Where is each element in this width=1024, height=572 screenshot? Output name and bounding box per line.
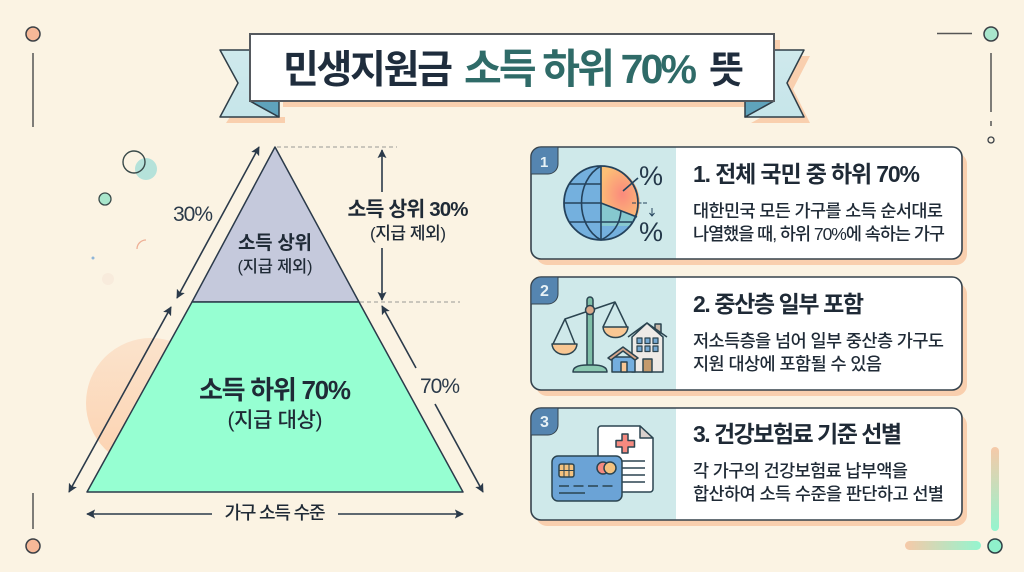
pyramid bottom label: 소득 하위 70%: [199, 375, 351, 405]
axis label: 가구 소득 수준: [224, 503, 326, 523]
arrow: horizontal income level: [87, 513, 463, 515]
pyramid top label: 소득 상위: [238, 232, 312, 254]
card 3 body: [693, 461, 944, 504]
right ribbon shadow: [751, 56, 810, 123]
pyramid bottom sublabel: (지급 대상): [228, 409, 322, 432]
left ribbon fold: [250, 101, 279, 117]
icon: globe with percent: %: [639, 217, 663, 247]
right ribbon: [745, 50, 804, 117]
callout: excluded: (지급 제외): [370, 224, 446, 243]
icon: medical document and card: [552, 426, 653, 501]
pyramid top sublabel: (지급 제외): [238, 257, 312, 276]
icon: scale and houses: [552, 297, 667, 372]
box shadow: [283, 40, 780, 107]
dashed guides: [277, 147, 460, 302]
label: 70%: 70%: [420, 375, 460, 398]
card 3 body: 합산하여 소득 수준을 판단하고 선별: [693, 484, 944, 504]
left ribbon: [220, 50, 279, 117]
right ribbon fold: [745, 101, 774, 117]
decoration: bottom-left dot and line: [26, 493, 40, 553]
card 2 body: 지원 대상에 포함될 수 있음: [693, 354, 882, 374]
card 1 heading: 1. 전체 국민 중 하위 70%: [693, 161, 920, 187]
decoration: top-left dot and line: [26, 27, 40, 127]
panel: card 3: [531, 408, 967, 526]
badge 1: 1: [540, 154, 548, 171]
decoration: bottom-right gradient bars and dot: [905, 447, 1002, 553]
arrow: right 70%: [382, 306, 483, 492]
pyramid bottom: lower 70%: [87, 302, 463, 492]
card 3 heading: 3. 건강보험료 기준 선별: [693, 421, 902, 447]
title text: 민생지원금: [283, 49, 453, 92]
title text: end: 뜻: [709, 50, 744, 92]
arrow: vertical upper 30%: [381, 150, 383, 300]
arrow: left 70%: [69, 307, 171, 492]
arrow: left 30%: [177, 147, 259, 298]
card 1 body: 대한민국 모든 가구를 소득 순서대로: [693, 201, 943, 221]
title banner: [220, 34, 810, 123]
pyramid chart: [87, 147, 463, 492]
card 3 body: 각 가구의 건강보험료 납부액을: [693, 461, 908, 481]
badge 2: [531, 277, 558, 304]
decoration: small circles left of pyramid: [92, 151, 157, 285]
badge 3: 3: [540, 414, 549, 431]
label: 30%: 30%: [173, 203, 213, 226]
icon: globe with percent: %: [639, 161, 663, 191]
decoration: large peach circle: [86, 338, 216, 468]
card 1 body: [693, 201, 945, 244]
icon: globe with percent: [564, 161, 663, 247]
title text: accent: 소득 하위 70%: [464, 46, 697, 92]
badge 1: [531, 147, 558, 174]
left ribbon shadow: [226, 117, 285, 123]
card 2 body: 저소득층을 넘어 일부 중산층 가구도: [693, 331, 944, 351]
pyramid top: upper 30%: [192, 147, 359, 302]
panel: card 2: [531, 277, 967, 396]
card 2 body: [693, 331, 944, 374]
badge 3: [531, 408, 558, 435]
badge 2: 2: [540, 283, 549, 300]
callout: upper 30%: 소득 상위 30%: [348, 198, 468, 221]
card 1 body: 나열했을 때, 하위 70%에 속하는 가구: [693, 224, 945, 244]
title box: [250, 34, 774, 101]
card 2 heading: 2. 중산층 일부 포함: [693, 291, 864, 317]
panel: card 1: [531, 147, 967, 265]
decoration: top-right dot and lines: [937, 27, 998, 143]
